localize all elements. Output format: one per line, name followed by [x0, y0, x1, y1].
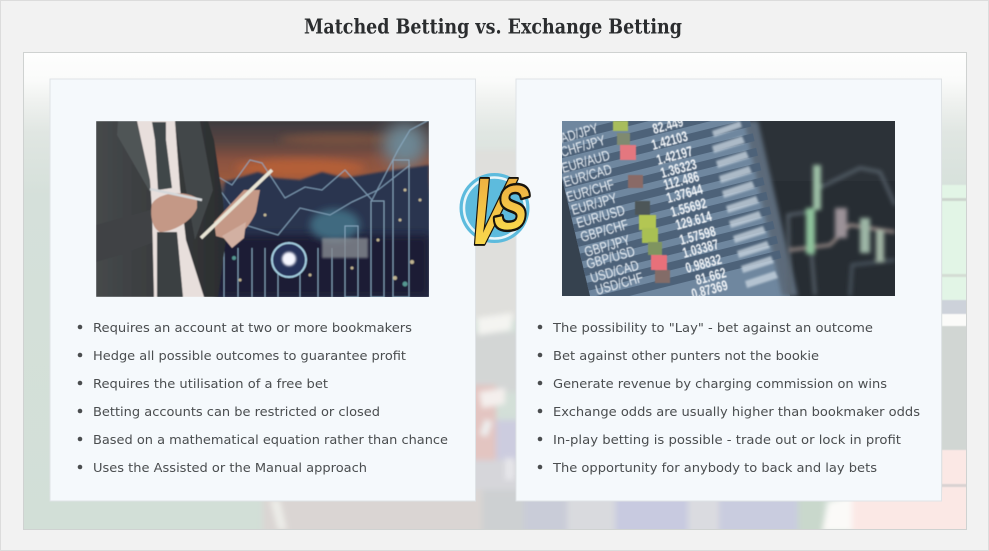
hand with pen	[151, 193, 197, 232]
image: forex odds board: 82.449	[651, 114, 685, 137]
bullet list: exchange betting: The possibility to "Lay" - bet against an outcome	[552, 320, 873, 335]
image: forex odds board	[562, 121, 895, 296]
image: businessman with tablet over city chart	[96, 120, 429, 297]
right gutter	[942, 185, 966, 492]
image: forex odds board: EUR/CAD	[562, 162, 614, 190]
image: forex odds board: 0.98832	[684, 251, 724, 276]
bullet list: matched betting: Requires an account at two or more bookmakers	[93, 320, 412, 335]
icon: VS badge: S	[492, 173, 532, 242]
image: forex odds board: USD/CHF	[594, 270, 645, 298]
image: forex odds board: GBP/JPY	[583, 232, 632, 260]
tie	[152, 122, 172, 190]
bullet list: matched betting: Betting accounts can be restricted or closed	[93, 404, 380, 419]
image: forex odds board: EUR/JPY	[570, 190, 619, 218]
image: forex odds board: USD/CAD	[589, 258, 641, 286]
image: forex odds board: 1.42103	[650, 128, 690, 153]
tablet hand and cuff	[214, 190, 260, 240]
image: forex odds board: 1.55692	[669, 195, 709, 220]
image: forex odds board: GBP/USD	[585, 244, 637, 272]
shirt	[137, 121, 204, 297]
image: forex odds board: CHF/JPY	[559, 132, 608, 160]
suit jacket	[96, 121, 226, 297]
arrow tiles	[613, 121, 670, 283]
bullet list: exchange betting: In-play betting is possible - trade out or lock in profit	[553, 432, 901, 447]
image: forex odds board: EUR/USD	[575, 203, 627, 231]
image: forex odds board: 0.87369	[690, 277, 730, 302]
centre gutter	[476, 236, 516, 488]
image: forex odds board: GBP/CHF	[579, 217, 630, 245]
image: forex odds board: 129.614	[674, 208, 714, 233]
bottom band	[266, 490, 942, 529]
bullet list: exchange betting: The opportunity for anybody to back and lay bets	[552, 460, 877, 475]
image: forex odds board: 81.662	[694, 265, 728, 288]
bullet list: matched betting	[78, 320, 448, 475]
bullet list: matched betting: Requires the utilisation of a free bet	[93, 376, 328, 391]
image: forex odds board: 1.57598	[678, 223, 718, 248]
title: Matched Betting vs. Exchange Betting	[304, 14, 682, 38]
image: forex odds board: AD/JPY	[559, 120, 600, 146]
bullet list: matched betting: Uses the Assisted or the Manual approach	[93, 460, 367, 475]
panel: exchange betting	[510, 79, 942, 501]
image: forex odds board: 1.42197	[655, 143, 695, 168]
image: forex odds board: 1.03387	[681, 236, 721, 261]
icon: VS badge: V	[460, 158, 522, 264]
image: forex odds board: EUR/AUD	[560, 148, 612, 176]
image: forex odds board: 1.36323	[659, 156, 699, 181]
image: forex odds board: 1.37644	[665, 181, 705, 206]
bullet list: matched betting: Hedge all possible outcomes to guarantee profit	[93, 348, 406, 363]
panel: matched betting	[50, 79, 476, 501]
bullet list: exchange betting: Exchange odds are usually higher than bookmaker odds	[553, 404, 920, 419]
bullet list: exchange betting	[538, 320, 920, 475]
candlestick chart	[788, 165, 895, 296]
bullet list: exchange betting: Generate revenue by charging commission on wins	[553, 376, 887, 391]
image: forex odds board: EUR/CHF	[565, 177, 616, 205]
bullet list: exchange betting: Bet against other punters not the bookie	[553, 348, 819, 363]
bullet list: matched betting: Based on a mathematical equation rather than chance	[93, 432, 448, 447]
image: forex odds board: 112.486	[662, 168, 701, 193]
